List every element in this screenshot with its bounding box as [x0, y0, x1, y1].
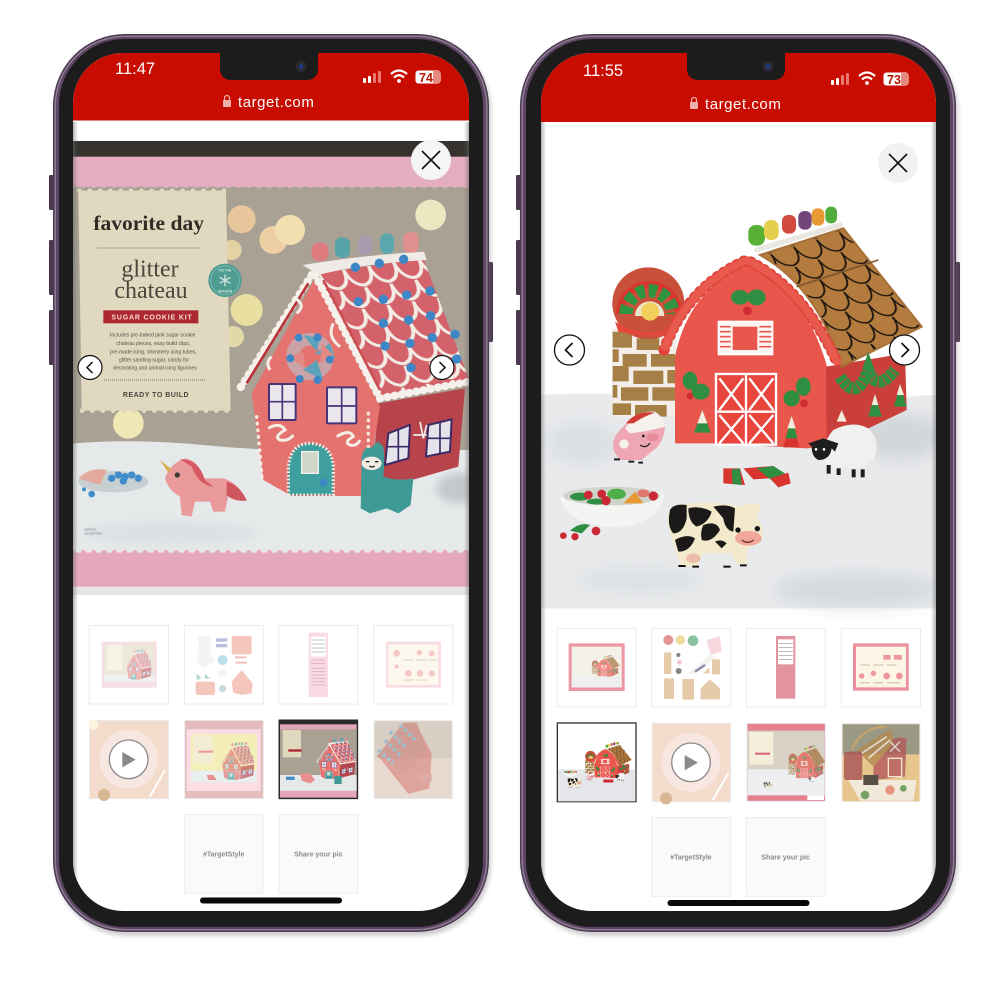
thumbnail: video with play button — [88, 720, 168, 801]
product name: glitter — [121, 257, 179, 283]
battery: left — [416, 70, 440, 85]
signal bars: right — [831, 73, 849, 85]
snow field — [541, 394, 943, 608]
status time: right: 11:55 — [583, 62, 623, 80]
thumbnail: instructions — [374, 625, 453, 704]
home indicator: right — [668, 900, 810, 906]
thumbnail: selected box photo — [279, 720, 358, 799]
serving suggestion: SERVING — [84, 527, 96, 531]
thumbnail: instructions — [841, 628, 920, 707]
battery: right: 73 — [887, 73, 901, 87]
status time: left: 11:47 — [115, 60, 155, 78]
snow — [73, 441, 258, 450]
right phone — [516, 34, 960, 936]
phone frame: right — [516, 34, 960, 936]
signal bars: left — [363, 71, 381, 83]
thumbnail: nutrition panel — [279, 625, 358, 704]
thumbnail: box front — [557, 628, 636, 707]
brand name: favorite day — [93, 213, 205, 235]
sheep figurine — [808, 425, 876, 477]
thumbnail grid: right — [557, 628, 920, 896]
label panel — [78, 191, 231, 411]
hashtag tile: #TargetStyle — [203, 851, 244, 858]
browser header: left — [73, 53, 469, 120]
kit description: glitter sanding sugar, candy for — [119, 357, 189, 363]
pig figurine — [613, 412, 665, 463]
next arrow: right — [890, 335, 920, 365]
previous arrow: right — [554, 335, 584, 365]
thumbnail: box photo — [747, 723, 825, 801]
address bar: left: target.com — [238, 94, 314, 111]
wifi icon: left — [391, 70, 407, 82]
kit description: pre-made icing, shimmery icing tubes, — [110, 349, 197, 355]
red kit banner — [103, 310, 198, 323]
thumbnail: finished house photo — [374, 721, 452, 799]
close button: left — [411, 140, 451, 180]
kit description: chateau pieces, easy build clips, — [116, 341, 190, 347]
loose candies — [560, 466, 791, 540]
thumbnail: kit contents — [184, 625, 263, 704]
left phone — [49, 34, 493, 936]
gingerbread barn and silo — [612, 207, 922, 448]
ready to build: READY TO BUILD — [123, 392, 189, 399]
product name: chateau — [114, 278, 188, 304]
share tile: Share your pic — [761, 854, 810, 861]
product photo: glitter chateau box — [73, 141, 483, 595]
browser header: right — [541, 53, 936, 122]
wifi icon: right — [859, 72, 875, 84]
thumbnail: finished barn photo — [842, 724, 920, 802]
notch: left — [220, 50, 318, 80]
notch: right — [687, 50, 785, 80]
red kit banner: SUGAR COOKIE KIT — [111, 314, 193, 321]
kit description: decorating and animal icing figurines — [113, 365, 197, 371]
kit description: Includes pre-baked pink sugar cookie — [110, 333, 196, 339]
thumbnail: selected barn photo — [557, 723, 636, 802]
candy bowl — [78, 469, 148, 497]
close button: right — [878, 143, 918, 183]
thumbnail: box front — [89, 625, 168, 704]
serving suggestion: SUGGESTION — [84, 531, 102, 535]
thumbnail: box on tabletop — [185, 720, 263, 799]
thumbnail grid: left — [88, 625, 453, 893]
gingerbread house: pink chateau — [240, 232, 469, 496]
pink bottom band — [73, 553, 469, 587]
address bar: right: target.com — [705, 96, 781, 113]
hashtag tile: #TargetStyle — [670, 854, 712, 861]
season badge: SEASON — [218, 289, 233, 293]
previous arrow: left — [78, 356, 102, 380]
llama figurine — [361, 442, 413, 513]
candy bowl — [560, 486, 664, 527]
thumbnail: video with play button — [652, 723, 731, 804]
thumbnail: nutrition panel — [746, 628, 825, 707]
home indicator: left — [200, 898, 342, 904]
unicorn figurine — [160, 458, 247, 517]
season badge: TIS THE — [219, 268, 232, 272]
phone frame: left — [49, 34, 493, 936]
hashtag tile — [652, 818, 731, 896]
cow figurine — [668, 502, 763, 567]
battery: right — [884, 72, 908, 87]
battery: left: 74 — [419, 71, 433, 85]
share tile — [279, 815, 358, 893]
share tile: Share your pic — [294, 851, 343, 858]
hashtag tile — [184, 815, 263, 893]
next arrow: left — [430, 356, 454, 380]
product photo: barn kit — [541, 207, 943, 608]
screen: left — [73, 53, 483, 911]
thumbnail: kit contents — [652, 628, 731, 707]
share tile — [746, 818, 825, 896]
season badge — [208, 264, 242, 297]
screen: right — [541, 53, 943, 911]
